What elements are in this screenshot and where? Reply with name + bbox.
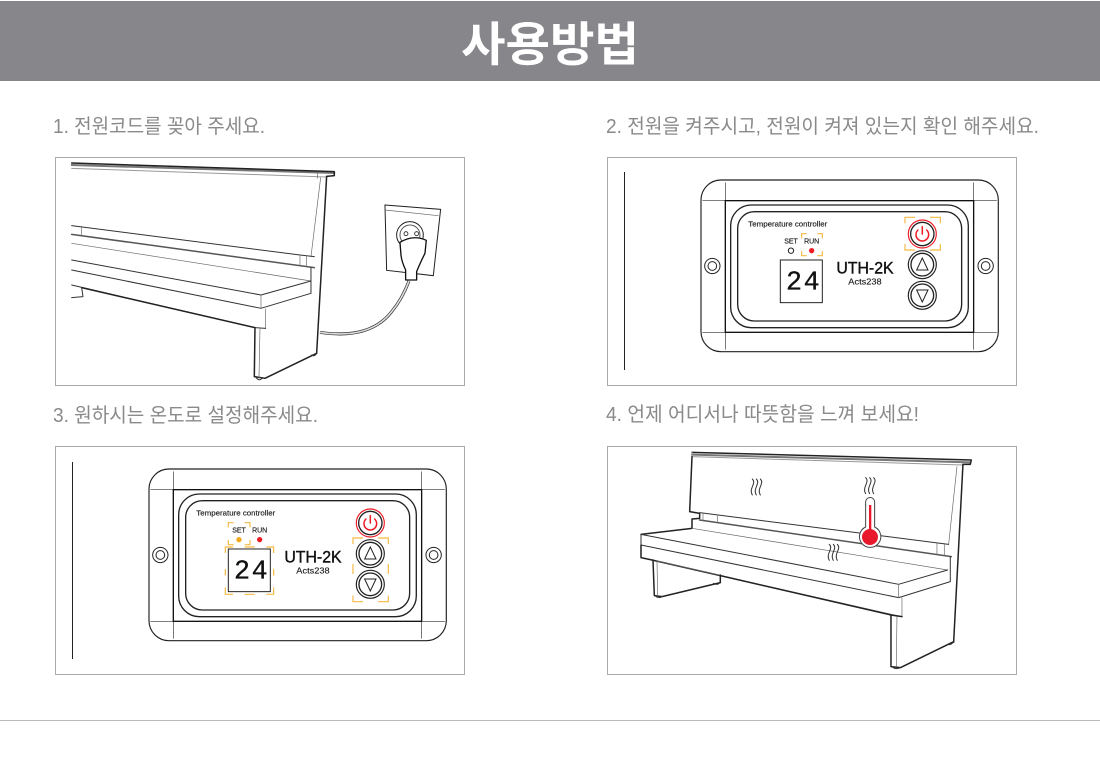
controller label: Temperature controller [748, 222, 828, 229]
controller illustration: Acts238 [848, 277, 882, 286]
controller label: Temperature controller [196, 511, 276, 518]
temperature display highlighted [225, 547, 274, 594]
up and down buttons highlighted [353, 538, 388, 602]
plug [400, 238, 426, 280]
RUN lamp on [802, 234, 822, 256]
screws [705, 258, 993, 274]
wall socket [385, 205, 441, 276]
heat waves seat [828, 544, 839, 560]
heat waves top [865, 478, 875, 494]
thermometer [859, 497, 881, 547]
controller illustration: Acts238 [296, 566, 330, 575]
panel 2: power on, RUN lamp check [608, 158, 1016, 386]
SET lamp on: SET [232, 527, 247, 534]
panel 4: warm bench [608, 446, 1016, 674]
power button [356, 509, 384, 537]
step 4 text: 4. 언제 어디서나 따뜻함을 느껴 보세요! [606, 403, 919, 426]
panel 1: plugging in the power cord [56, 158, 464, 386]
illustration: bench with cord and wall socket [72, 163, 441, 380]
step 1 text: 1. 전원코드를 꽂아 주세요. [53, 115, 265, 138]
controller illustration [149, 469, 446, 641]
step 3 text: 3. 원하시는 온도로 설정해주세요. [53, 404, 318, 427]
RUN lamp on: RUN [252, 527, 267, 534]
illustration: heated bench [641, 452, 971, 669]
controller illustration [701, 180, 998, 352]
temperature display highlighted: 24 [234, 557, 269, 587]
heat waves left [751, 479, 762, 495]
step 2 text: 2. 전원을 켜주시고, 전원이 켜져 있는지 확인 해주세요. [606, 115, 1039, 138]
SET lamp off [784, 238, 799, 253]
power cord [320, 281, 409, 334]
model name: UTH-2K [836, 258, 894, 277]
RUN lamp on: RUN [804, 238, 819, 245]
temperature display: 24 [786, 268, 821, 298]
up button [908, 251, 936, 279]
screws [153, 547, 441, 563]
RUN lamp on [252, 527, 267, 542]
model name: UTH-2K [284, 547, 342, 566]
down button [908, 281, 936, 309]
temperature display [780, 260, 822, 303]
SET lamp on [228, 523, 250, 545]
SET lamp off: SET [784, 238, 799, 245]
title: 사용방법 [461, 18, 639, 71]
header band [0, 1, 1100, 81]
panel 3: set the temperature [56, 446, 464, 674]
power button highlighted [905, 217, 940, 250]
